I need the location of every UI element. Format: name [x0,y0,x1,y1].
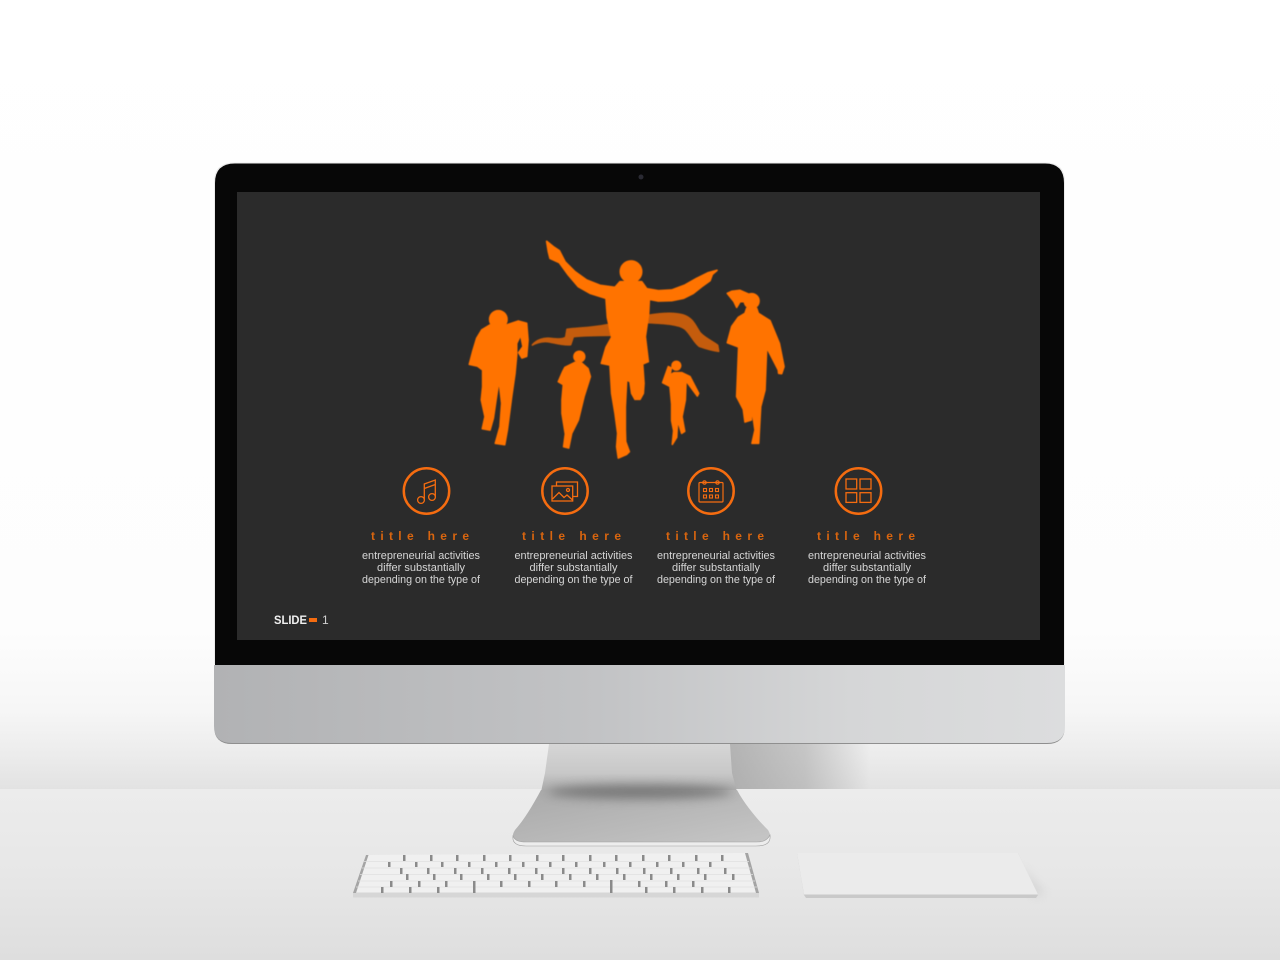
description [362,550,481,586]
stand neck [541,744,737,792]
trackpad top [797,853,1038,898]
slide number [274,613,329,627]
description [657,550,776,586]
slide number: SLIDE [274,615,307,627]
trackpad [797,853,1046,898]
monitor shadow on wall [725,744,870,789]
description: depending on the type of [808,574,927,586]
key gaps [381,855,734,893]
slide screen [237,192,1040,640]
monitor chin [214,665,1065,744]
title: title here [522,529,621,543]
column 2 [514,468,633,586]
description: differ substantially [377,562,465,574]
description: differ substantially [530,562,618,574]
title: title here [371,529,469,543]
monitor stand [513,744,770,846]
stand base [513,790,770,843]
stand shadow band [548,785,732,799]
finish ribbon [532,313,719,351]
title: title here [817,529,915,543]
description: depending on the type of [514,574,633,586]
description: depending on the type of [362,574,481,586]
icon: calendar [688,468,734,514]
keyboard [353,853,759,898]
icon: music note [404,468,449,514]
runner: winner [547,241,717,458]
runner: small left [558,351,590,448]
runner: woman [727,290,784,443]
description: differ substantially [823,562,911,574]
description [808,550,927,586]
runner: small right [663,361,699,444]
description: depending on the type of [657,574,776,586]
description: differ substantially [672,562,760,574]
title: title here [666,529,764,543]
runner: left [469,311,528,445]
trackpad shadow [1020,865,1046,895]
slide number: 1 [322,613,329,627]
description: entrepreneurial activities [362,550,480,562]
webcam [638,174,644,180]
monitor rim [214,162,1065,664]
monitor [214,162,1065,744]
chin bottom edge [214,726,1065,744]
description: entrepreneurial activities [808,550,926,562]
keyboard body [353,853,759,897]
key row lines [356,862,757,887]
runners illustration [469,241,784,458]
icon: grid [836,468,881,514]
monitor black bezel [215,164,1064,665]
description [514,550,633,586]
column 3 [657,468,776,586]
column 4 [808,468,927,586]
description: entrepreneurial activities [514,550,633,562]
description: entrepreneurial activities [657,550,775,562]
column 1 [362,468,481,586]
desk surface [0,789,1280,960]
stand base front edge [513,835,770,846]
icon: pictures [542,468,588,514]
